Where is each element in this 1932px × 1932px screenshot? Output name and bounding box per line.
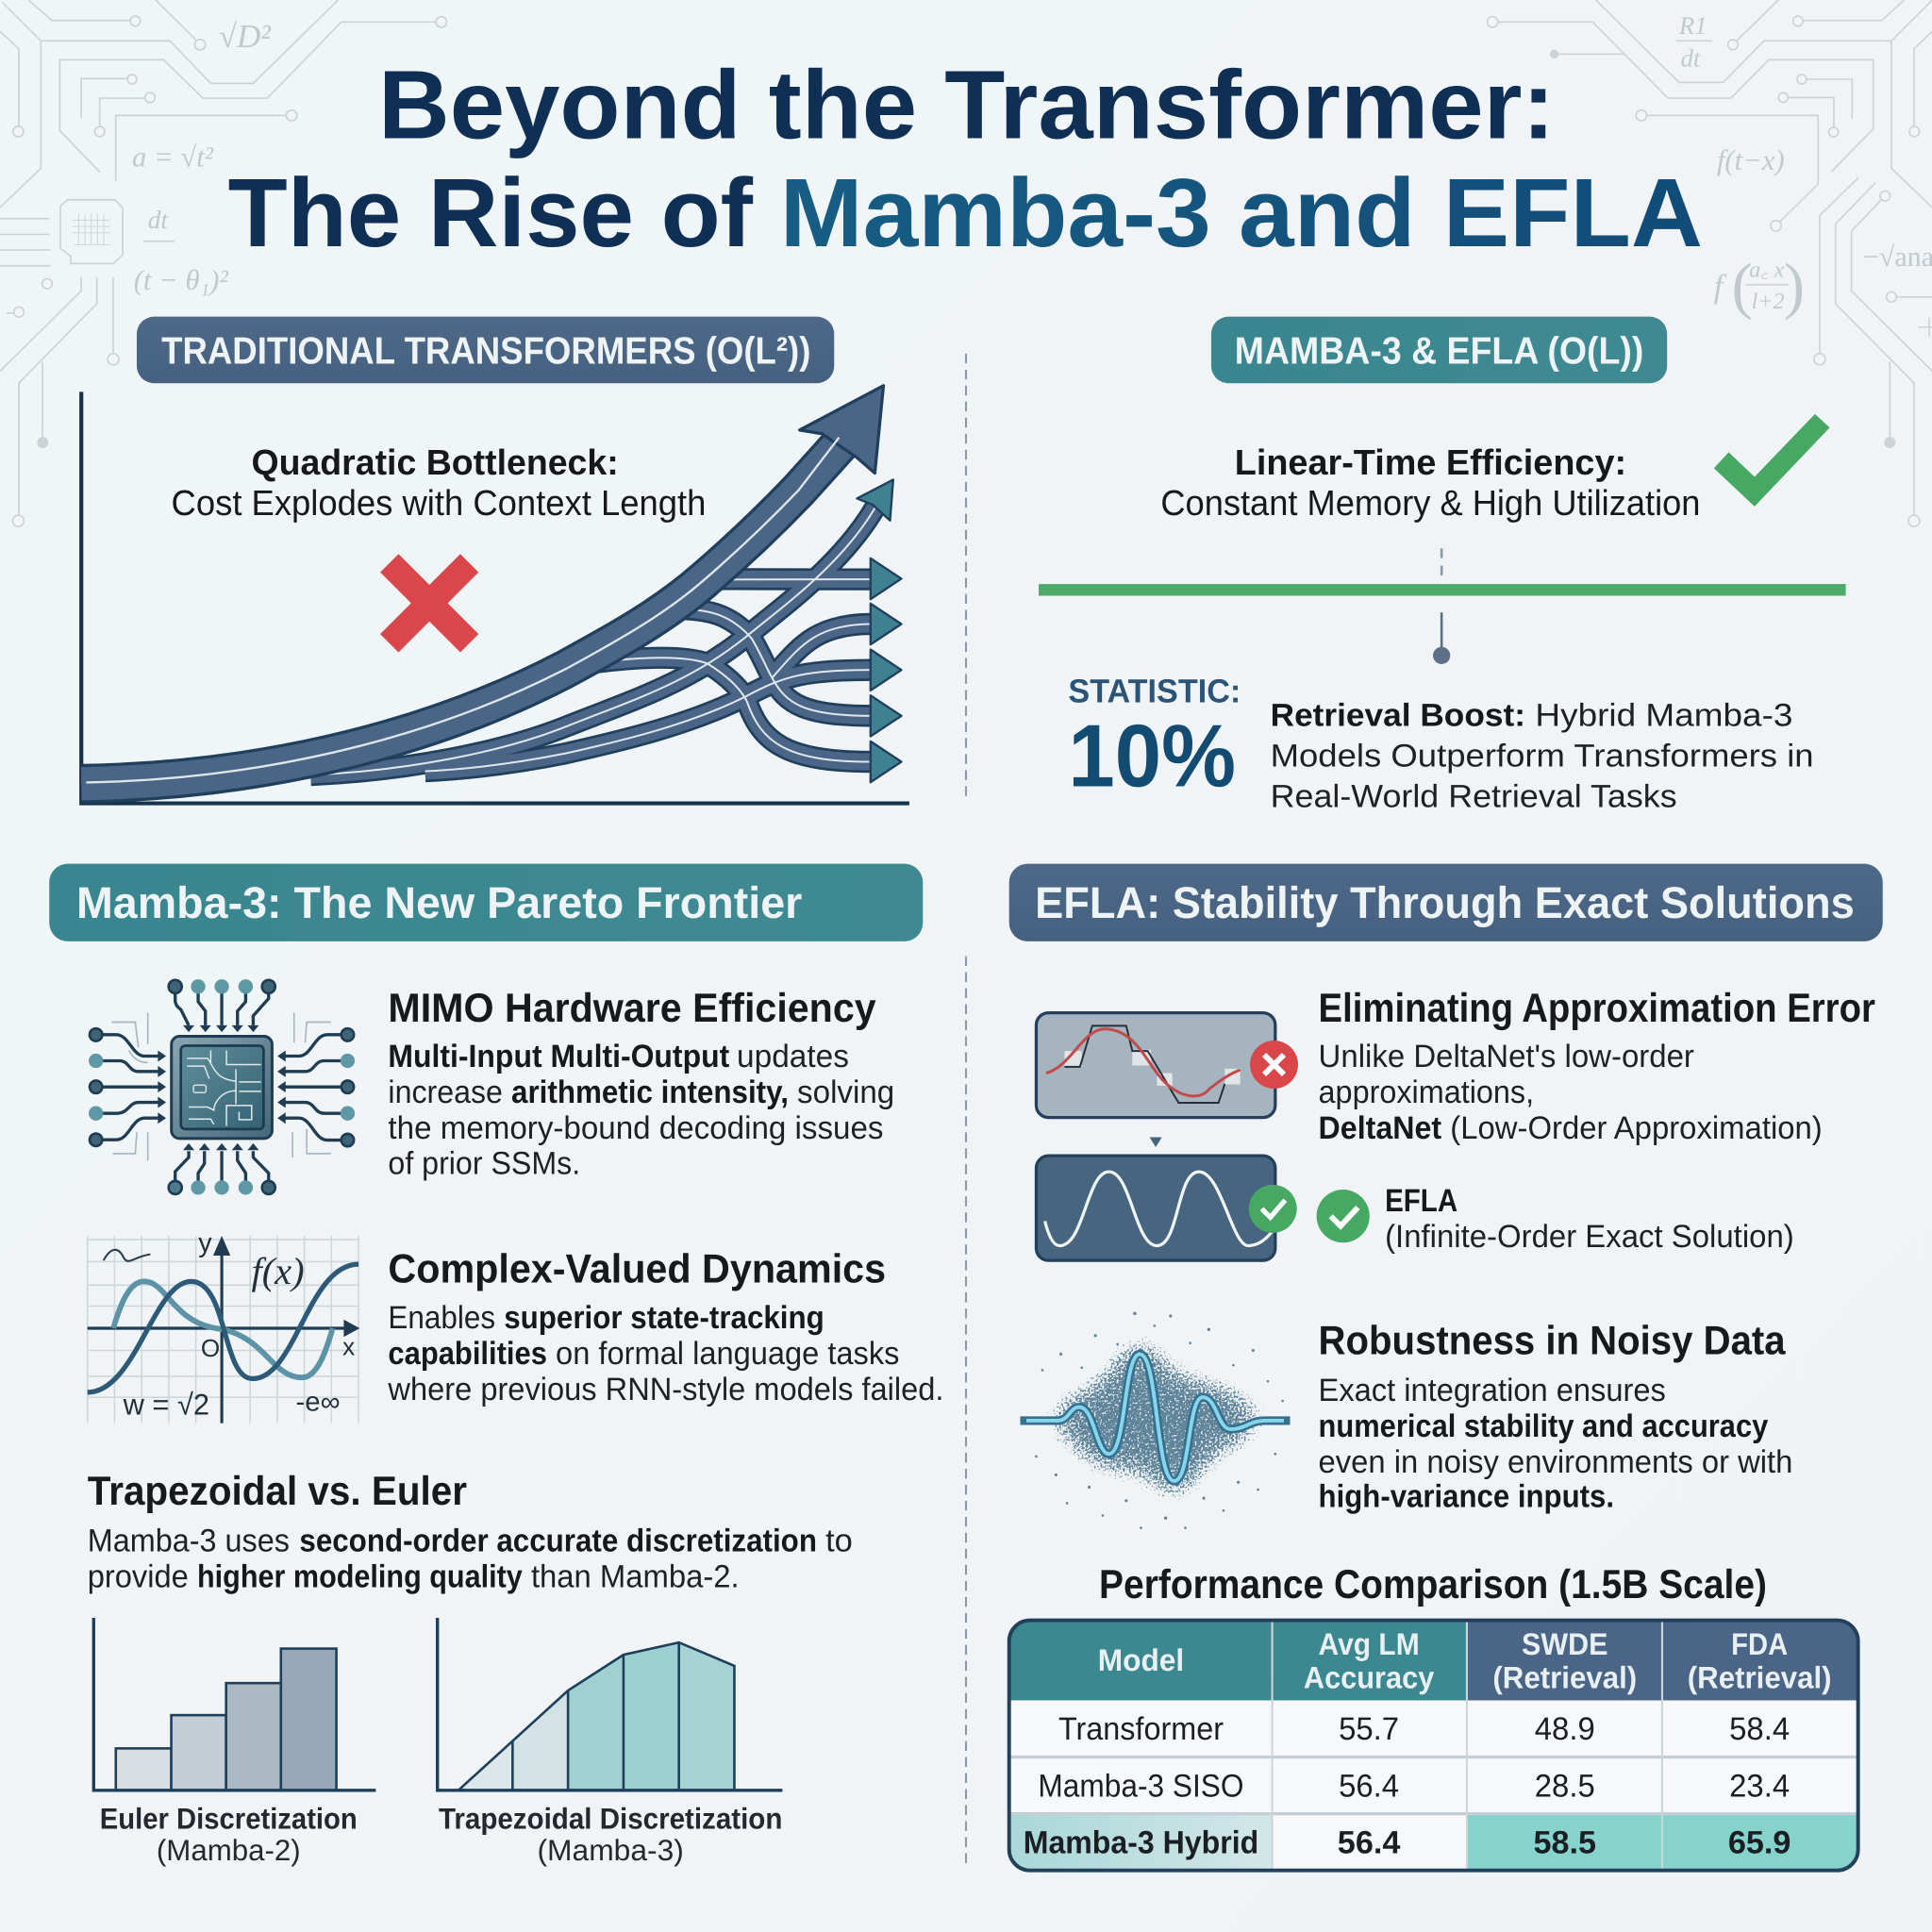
header: mamba-3 pareto frontier <box>49 864 923 941</box>
table: performance comparison: SWDE <box>1522 1627 1607 1662</box>
text: eliminating approximation error: DeltaNet <box>1319 1109 1442 1146</box>
text: MIMO hardware efficiency: solving <box>797 1074 894 1110</box>
statistic: 10%: STATISTIC: <box>1068 673 1241 709</box>
caption: linear-time efficiency: Constant Memory & High Utilization <box>1160 484 1700 524</box>
diagram: DeltaNet approximation vs EFLA exact <box>1036 1013 1370 1260</box>
title: Mamba-3 and EFLA <box>780 158 1703 267</box>
circuit decoration: top left <box>0 0 447 526</box>
text: complex-valued dynamics: superior state-tracking <box>504 1299 824 1336</box>
chart: trapezoidal discretization: Trapezoidal Discretization <box>439 1803 782 1836</box>
table: performance comparison: 55.7 <box>1339 1710 1399 1747</box>
table: performance comparison: 58.5 <box>1533 1824 1596 1860</box>
chart: complex function plot <box>88 1227 359 1424</box>
text: eliminating approximation error: Unlike DeltaNet's low-order <box>1319 1038 1694 1074</box>
table: performance comparison: Mamba-3 Hybrid <box>1024 1824 1258 1860</box>
text: complex-valued dynamics: on formal language tasks <box>556 1335 899 1372</box>
text: robustness in noisy data: even in noisy environments or with <box>1319 1442 1792 1480</box>
text: eliminating approximation error: EFLA <box>1385 1182 1457 1219</box>
table: performance comparison: Accuracy <box>1304 1661 1434 1695</box>
circuit decoration: top right: a꜀ x <box>1749 257 1784 282</box>
circuit decoration: top right: ( <box>1732 251 1753 321</box>
chart: trapezoidal discretization: (Mamba-3) <box>537 1835 684 1868</box>
text: MIMO hardware efficiency: of prior SSMs. <box>388 1144 580 1182</box>
text: complex-valued dynamics: Complex-Valued Dynamics <box>388 1245 886 1291</box>
circuit decoration: top right: f(t−x) <box>1717 144 1785 176</box>
table: performance comparison: (Retrieval) <box>1688 1661 1832 1695</box>
badge: mamba-3 and efla: MAMBA-3 & EFLA (O(L)) <box>1235 329 1643 372</box>
badge: red error <box>1250 1041 1298 1089</box>
table: performance comparison: Avg LM <box>1319 1627 1420 1662</box>
text: complex-valued dynamics: Enables <box>388 1299 495 1336</box>
text: trapezoidal vs euler: higher modeling quality <box>197 1557 523 1594</box>
icon: red cross <box>390 563 470 643</box>
chart: complex function plot: w = √2 <box>122 1389 209 1422</box>
text: robustness in noisy data: numerical stability and accuracy <box>1319 1407 1769 1444</box>
header: EFLA stability: EFLA: Stability Through Exact Solutions <box>1035 877 1855 928</box>
chart: Euler discretization: Euler Discretization <box>100 1803 358 1836</box>
box: EFLA exact wave <box>1036 1156 1275 1260</box>
title: The Rise of <box>228 158 754 267</box>
text: trapezoidal vs euler: Trapezoidal vs. Euler <box>88 1468 467 1513</box>
chart: complex function plot: O <box>201 1336 220 1363</box>
text: trapezoidal vs euler: to <box>825 1522 853 1558</box>
text: eliminating approximation error: (Infinite-Order Exact Solution) <box>1385 1217 1794 1255</box>
icon: green check <box>1317 1190 1370 1242</box>
icon: MIMO chip <box>89 979 355 1195</box>
section: mamba-3 <box>49 864 943 1868</box>
badge: green check on wave <box>1249 1185 1297 1233</box>
circuit decoration: top left: √D² <box>219 18 271 55</box>
circuit decoration: top right: l+2 <box>1752 288 1784 313</box>
circuit decoration: top left: (t − θ₁)² <box>134 263 228 295</box>
chart: Euler discretization <box>93 1618 375 1868</box>
text: complex-valued dynamics <box>387 1245 943 1407</box>
text: complex-valued dynamics: capabilities <box>388 1335 547 1372</box>
caption: quadratic bottleneck <box>172 443 706 524</box>
circuit decoration: top left: a = √t² <box>132 141 213 173</box>
text: eliminating approximation error: (Low-Order Approximation) <box>1450 1109 1823 1146</box>
title <box>228 49 1703 267</box>
text: eliminating approximation error: approximations, <box>1319 1074 1534 1110</box>
text: MIMO hardware efficiency: increase <box>388 1074 503 1110</box>
text: retrieval boost: Models Outperform Transformers in <box>1271 737 1814 774</box>
table: performance comparison: 56.4 <box>1339 1767 1399 1804</box>
table: performance comparison <box>1009 1621 1858 1871</box>
arrow: down <box>1150 1138 1162 1147</box>
chart: complex function plot: y <box>198 1227 212 1258</box>
text: robustness in noisy data: Exact integration ensures <box>1319 1372 1666 1408</box>
text: MIMO hardware efficiency: arithmetic intensity, <box>511 1074 789 1110</box>
table: performance comparison: Model <box>1098 1643 1184 1678</box>
circuit decoration: top right <box>1487 0 1932 526</box>
chart: complex function plot: f(x) <box>251 1249 305 1292</box>
caption: quadratic bottleneck: Cost Explodes with Context Length <box>172 484 706 524</box>
caption: linear-time efficiency <box>1160 443 1700 524</box>
table heading: Performance Comparison (1.5B Scale) <box>1099 1561 1767 1607</box>
chart axes <box>81 391 909 804</box>
table: performance comparison: FDA <box>1731 1627 1788 1662</box>
circuit decoration: top left: dt <box>148 205 169 234</box>
badge: traditional transformers <box>137 317 834 383</box>
text: MIMO hardware efficiency: Multi-Input Multi-Output <box>388 1038 730 1074</box>
text: robustness in noisy data: high-variance inputs. <box>1319 1477 1614 1514</box>
text: retrieval boost: Hybrid Mamba-3 <box>1535 696 1792 733</box>
badge: traditional transformers: TRADITIONAL TRANSFORMERS (O(L²)) <box>161 329 810 372</box>
table: performance comparison: Transformer <box>1058 1710 1224 1747</box>
circuit decoration: top right: f <box>1714 268 1727 305</box>
text: trapezoidal vs euler: provide <box>88 1557 189 1594</box>
caption: linear-time efficiency: Linear-Time Efficiency: <box>1235 443 1626 483</box>
icon: noisy signal <box>1020 1312 1291 1529</box>
text: MIMO hardware efficiency: MIMO Hardware Efficiency <box>388 985 876 1030</box>
badge: mamba-3 and efla <box>1211 317 1667 383</box>
circuit decoration: top right: ) <box>1784 251 1805 321</box>
center divider top <box>965 354 967 798</box>
text: trapezoidal vs euler: second-order accurate discretization <box>299 1522 817 1558</box>
text: retrieval boost: Real-World Retrieval Tasks <box>1271 777 1677 814</box>
text: MIMO hardware efficiency: the memory-bound decoding issues <box>388 1109 883 1146</box>
circuit decoration: top right: −√ana <box>1863 241 1932 272</box>
panel: traditional transformers <box>81 317 909 804</box>
circuit decoration: top right: dt <box>1681 44 1701 73</box>
text: robustness in noisy data: Robustness in Noisy Data <box>1319 1317 1786 1363</box>
center divider bottom <box>965 957 967 1867</box>
table: performance comparison: (Retrieval) <box>1492 1661 1637 1695</box>
text: MIMO hardware efficiency: updates <box>737 1038 849 1074</box>
panel: mamba-3 and efla <box>1039 317 1846 814</box>
text: robustness in noisy data <box>1319 1317 1792 1514</box>
header: mamba-3 pareto frontier: Mamba-3: The New Pareto Frontier <box>76 877 802 928</box>
table: performance comparison: 56.4 <box>1338 1824 1401 1860</box>
text: eliminating approximation error <box>1319 985 1875 1255</box>
table: performance comparison: 48.9 <box>1535 1710 1595 1747</box>
main quadratic arrow <box>81 386 883 784</box>
text: retrieval boost: Retrieval Boost: <box>1271 696 1525 733</box>
chart: Euler discretization: (Mamba-2) <box>157 1835 301 1868</box>
header: EFLA stability <box>1009 864 1883 941</box>
text: trapezoidal vs euler: Mamba-3 uses <box>88 1522 290 1558</box>
icon: green check <box>1714 414 1830 507</box>
linear trend bar <box>1039 548 1846 664</box>
title: Beyond the Transformer: <box>378 49 1555 158</box>
table: performance comparison: 58.4 <box>1729 1710 1790 1747</box>
chart: complex function plot: -e∞ <box>295 1386 340 1417</box>
section: EFLA <box>1009 864 1883 1871</box>
text: trapezoidal vs euler: than Mamba-2. <box>531 1557 740 1594</box>
table: performance comparison: 23.4 <box>1729 1767 1790 1804</box>
chart: complex function plot: x <box>342 1335 355 1361</box>
circuit decoration: top right: R1 <box>1679 12 1707 40</box>
statistic: 10%: 10% <box>1068 708 1236 806</box>
table: performance comparison: Mamba-3 SISO <box>1038 1767 1244 1804</box>
chart: exploding quadratic cost arrows <box>81 386 909 804</box>
branching streams <box>310 479 901 782</box>
caption: quadratic bottleneck: Quadratic Bottleneck: <box>251 443 619 483</box>
text: trapezoidal vs euler <box>88 1468 853 1594</box>
text: MIMO hardware efficiency <box>388 985 894 1182</box>
text: complex-valued dynamics: where previous RNN-style models failed. <box>387 1370 943 1407</box>
text: retrieval boost <box>1271 696 1814 814</box>
box: DeltaNet approximation wave <box>1036 1013 1275 1118</box>
table: performance comparison: 65.9 <box>1728 1824 1790 1860</box>
chart: trapezoidal discretization <box>438 1618 782 1868</box>
table: performance comparison: 28.5 <box>1535 1767 1595 1804</box>
text: eliminating approximation error: Eliminating Approximation Error <box>1319 985 1875 1030</box>
